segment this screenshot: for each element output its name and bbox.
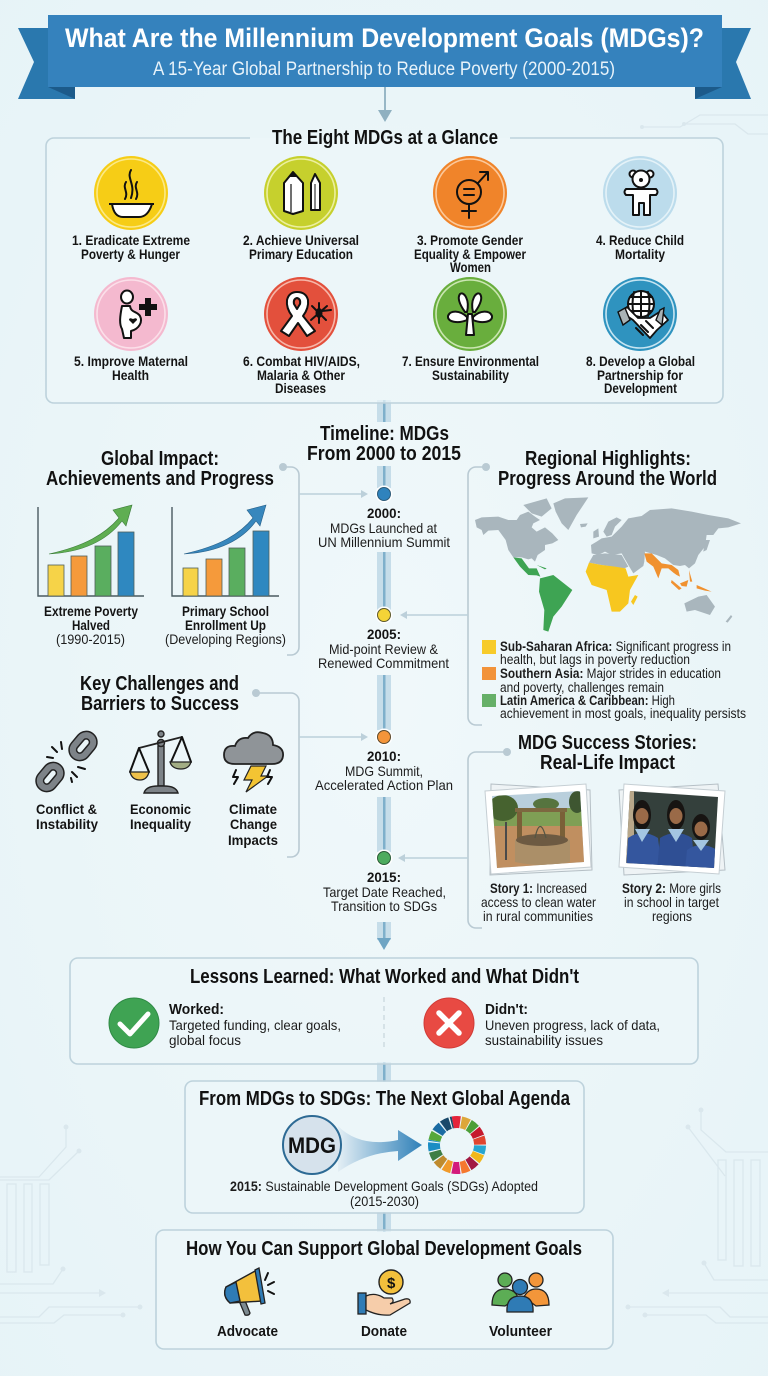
icon: donate: $ (387, 1275, 396, 1292)
text: didn't: Didn't: (485, 1001, 528, 1018)
caption: story 1: access to clean water (481, 894, 596, 910)
icon: cross (424, 998, 474, 1048)
connector: regional bracket (400, 463, 490, 725)
legend: Latin America & Caribbean: High (500, 693, 675, 708)
heading: eight MDGs: The Eight MDGs at a Glance (272, 126, 498, 149)
panel: global impact: Achievements and Progress (46, 467, 274, 490)
icon: MDG circle (283, 1116, 341, 1174)
icon: storm cloud: Change (230, 816, 277, 832)
photo: schoolgirls (619, 784, 725, 875)
arrow: transition (338, 1126, 422, 1172)
connector: impact bracket (279, 463, 368, 655)
caption: story 1: in rural communities (483, 908, 593, 924)
text: worked: Worked: (169, 1001, 224, 1018)
photo: village well (485, 784, 592, 875)
goal 8 (586, 277, 695, 396)
caption: SDGs adopted: 2015: Sustainable Development Goals (SDGs) Adopted (230, 1178, 538, 1194)
panel: how to support (156, 1230, 613, 1349)
goal 6: 6. Combat HIV/AIDS, (243, 353, 360, 369)
chart: school enrollment: Primary School (182, 603, 269, 619)
text: didn't (485, 1001, 660, 1048)
legend: health, but lags in poverty reduction (500, 652, 690, 667)
goal 6 (243, 277, 360, 396)
heading: MDGs to SDGs: From MDGs to SDGs: The Next Global Agenda (199, 1087, 570, 1110)
heading: timeline (307, 422, 461, 465)
timeline: 2005 (318, 606, 449, 671)
heading: regional highlights: Regional Highlights: (525, 447, 691, 470)
icon: broken chain (36, 732, 98, 832)
goal 4: 4. Reduce Child (596, 232, 684, 248)
icon: scales (130, 731, 191, 832)
panel: key challenges: Barriers to Success (81, 692, 239, 715)
icon: volunteers (489, 1273, 552, 1340)
header banner (18, 15, 751, 99)
caption: story 2: in school in target (624, 894, 719, 910)
goal 3: Women (450, 259, 491, 275)
text: worked (169, 1001, 341, 1048)
timeline: 2000: UN Millennium Summit (318, 534, 450, 550)
text: didn't: Uneven progress, lack of data, (485, 1017, 660, 1033)
icon: scales: Inequality (130, 816, 191, 832)
goal 1: Poverty & Hunger (81, 246, 180, 262)
chart: extreme poverty: Extreme Poverty (44, 603, 138, 619)
caption: SDGs adopted (230, 1178, 538, 1209)
icon: storm cloud: Impacts (228, 832, 278, 848)
connector: stories bracket (398, 748, 511, 928)
chart: extreme poverty: (1990-2015) (56, 631, 125, 647)
chart: extreme poverty: Halved (72, 617, 110, 633)
panel: regional highlights: Progress Around the World (498, 467, 717, 490)
goal 8: Partnership for (597, 367, 683, 383)
heading: success stories: MDG Success Stories: (518, 731, 697, 754)
caption: story 1: Story 1: Increased (490, 880, 587, 896)
timeline: 2010: MDG Summit, (345, 763, 423, 779)
panel: global impact (38, 447, 368, 655)
legend: and poverty, challenges remain (500, 680, 664, 695)
legend: Sub-Saharan Africa: Significant progress in (500, 639, 731, 654)
timeline: 2000: 2000: (367, 505, 401, 521)
goal 8: 8. Develop a Global (586, 353, 695, 369)
goal 4: Mortality (615, 246, 665, 262)
title: What Are the Millennium Development Goals (MDGs)? (65, 23, 704, 53)
chart: school enrollment: (Developing Regions) (165, 631, 286, 647)
chart: extreme poverty (38, 505, 144, 647)
timeline: 2015 (323, 850, 446, 914)
legend: Southern Asia: Major strides in education (500, 666, 721, 681)
icon: megaphone (217, 1268, 278, 1340)
heading: key challenges: Key Challenges and (80, 672, 239, 695)
icon: megaphone: Advocate (217, 1323, 278, 1340)
timeline: 2005: Renewed Commitment (318, 655, 449, 671)
heading: global impact: Global Impact: (101, 447, 219, 470)
goal 6: Diseases (275, 380, 326, 396)
legend: achievement in most goals, inequality persists (500, 706, 746, 721)
text: worked: global focus (169, 1032, 241, 1048)
goal 5: Health (112, 367, 149, 383)
panel: eight MDGs (46, 126, 723, 403)
legend (482, 639, 746, 721)
arrow: banner to goals (378, 87, 392, 122)
timeline spine (377, 400, 391, 1232)
icon: broken chain: Conflict & (36, 801, 97, 817)
text: didn't: sustainability issues (485, 1032, 603, 1048)
goal 2 (243, 156, 359, 262)
panel: key challenges (36, 672, 368, 857)
goal 5: 5. Improve Maternal (74, 353, 188, 369)
timeline: 2015: Transition to SDGs (331, 898, 437, 914)
icon: scales: Economic (130, 801, 191, 817)
timeline: 2015: 2015: (367, 869, 401, 885)
subtitle: A 15-Year Global Partnership to Reduce Poverty (2000-2015) (153, 59, 615, 80)
icon: donate: Donate (361, 1323, 407, 1340)
panel: lessons learned (70, 958, 698, 1064)
goal 3: Equality & Empower (414, 246, 526, 262)
chart: school enrollment (165, 505, 286, 647)
goal 7: 7. Ensure Environmental (402, 353, 539, 369)
timeline: 2010 (315, 728, 453, 793)
icon: volunteers: Volunteer (489, 1323, 552, 1340)
timeline: 2010: 2010: (367, 748, 401, 764)
goal 3: 3. Promote Gender (417, 232, 523, 248)
heading: timeline: Timeline: MDGs (320, 422, 449, 445)
icon: SDG wheel (430, 1118, 484, 1172)
icon: check (109, 998, 159, 1048)
timeline: 2015: Target Date Reached, (323, 884, 446, 900)
timeline: 2000 (318, 486, 450, 550)
icon: storm cloud: Climate (229, 801, 277, 817)
heading: how to support: How You Can Support Global Development Goals (186, 1237, 582, 1260)
caption: story 2: regions (652, 908, 692, 924)
icon: MDG circle: MDG (288, 1133, 336, 1158)
panel: MDGs to SDGs (185, 1081, 584, 1213)
goal 4 (596, 156, 684, 262)
panel: success stories: Real-Life Impact (540, 751, 675, 774)
goal 3 (414, 156, 526, 275)
panel: regional highlights (400, 447, 746, 725)
timeline: 2005: 2005: (367, 626, 401, 642)
goal 7 (402, 277, 539, 383)
text: worked: Targeted funding, clear goals, (169, 1017, 341, 1033)
chart: school enrollment: Enrollment Up (185, 617, 266, 633)
connector: challenges bracket (252, 689, 368, 857)
icon: donate (358, 1270, 410, 1340)
heading: timeline: From 2000 to 2015 (307, 442, 461, 465)
world map (475, 497, 741, 632)
caption: story 2 (622, 880, 721, 924)
timeline: 2000: MDGs Launched at (330, 520, 437, 536)
caption: story 2: Story 2: More girls (622, 880, 721, 896)
goal 6: Malaria & Other (257, 367, 345, 383)
goal 5 (74, 277, 188, 383)
timeline: 2005: Mid-point Review & (329, 641, 439, 657)
goal 8: Development (604, 380, 677, 396)
heading: lessons: Lessons Learned: What Worked and What Didn't (190, 965, 579, 988)
timeline: 2010: Accelerated Action Plan (315, 777, 453, 793)
icon: broken chain: Instability (36, 816, 98, 832)
panel: success stories (398, 731, 725, 928)
goal 1 (72, 156, 190, 262)
caption: story 1 (481, 880, 596, 924)
goal 2: 2. Achieve Universal (243, 232, 359, 248)
icon: storm cloud (224, 732, 283, 848)
caption: SDGs adopted: (2015-2030) (350, 1193, 419, 1209)
goal 2: Primary Education (249, 246, 353, 262)
goal 1: 1. Eradicate Extreme (72, 232, 190, 248)
goal 7: Sustainability (432, 367, 509, 383)
